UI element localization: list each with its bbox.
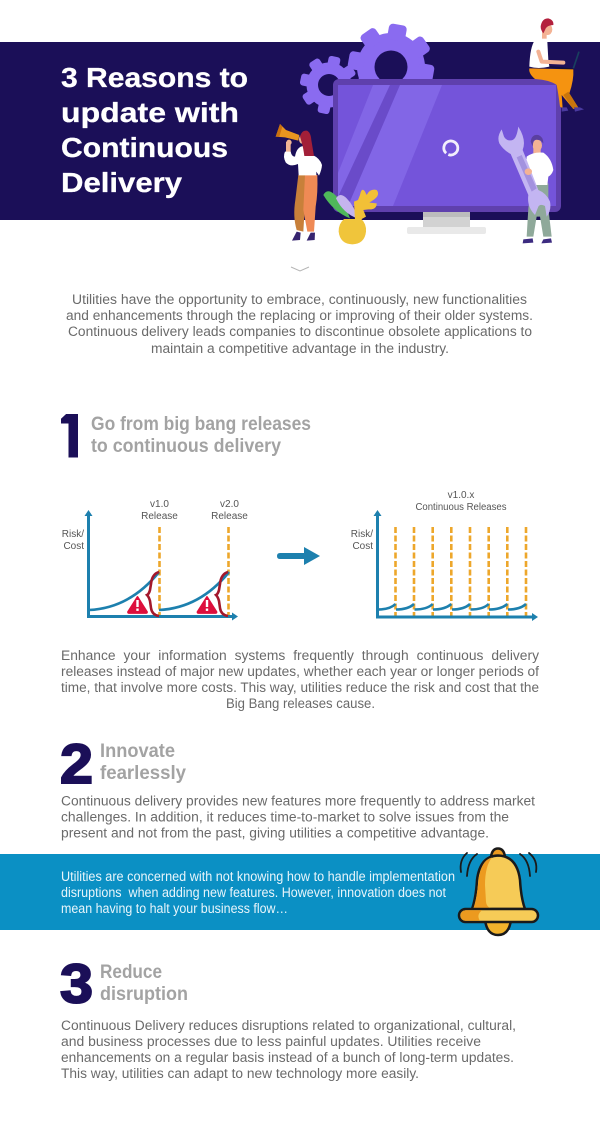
callout text: Utilities are concerned with not knowing how to handle implementation [61,869,455,884]
callout text: disruptions when adding new features. However, innovation does not [61,885,446,900]
labels: v2.0 [220,499,239,510]
section 2 paragraph [61,794,535,840]
icon: potted plant [323,190,378,244]
arrow [277,547,320,565]
labels: Cost [352,541,373,552]
section 3 paragraph [61,1018,516,1081]
intro text: and enhancements through the replacing or improving of their older systems. [66,308,533,323]
dashed release lines [160,527,228,617]
callout text [61,869,455,916]
section 3 paragraph: and business processes due to less painful updates. Utilities receive [61,1034,481,1049]
risk curve [378,604,526,610]
section 1 paragraph: Big Bang releases cause. [226,696,375,711]
callout band [0,854,600,930]
title: Continuous [61,132,228,163]
chart: continuous releases [351,490,538,621]
section 2 paragraph: Continuous delivery provides new features more frequently to address market [61,794,535,808]
labels: v1.0.x [448,490,474,501]
icon: small gear [295,51,363,119]
section 3 paragraph: This way, utilities can adapt to new technology more easily. [61,1066,419,1081]
monitor stand [407,212,486,234]
header band [0,42,600,220]
chart: big bang releases [62,499,248,620]
section 3 number: 3 [60,952,93,1014]
monitor [333,79,561,212]
intro text: Continuous delivery leads companies to discontinue obsolete applications to [68,324,532,339]
section 1 paragraph: Enhance your information systems frequently through continuous delivery [61,648,539,663]
labels: Continuous Releases [416,502,506,513]
icon: bell [459,848,538,935]
red braces [147,572,228,616]
section 1 heading [91,414,311,457]
intro text: maintain a competitive advantage in the industry. [151,341,449,356]
axes [84,510,238,620]
warning icons [128,597,216,613]
labels: Risk/ [351,529,373,540]
title [61,62,248,198]
section 3 heading: disruption [100,984,188,1005]
section 3 heading [100,962,188,1005]
section 1 heading: to continuous delivery [91,436,281,457]
figure: man with laptop [529,18,584,112]
title: Delivery [61,167,182,198]
intro text: Utilities have the opportunity to embrace, continuously, new functionalities [72,292,527,307]
labels: v1.0 [150,499,169,510]
risk curves [89,572,229,610]
section 1 paragraph: time, that involve more costs. This way, utilities reduce the risk and cost that the [61,680,539,695]
section 2 heading [100,741,186,784]
figure: man with wrench [498,127,553,243]
section 2 number: 2 [60,732,93,795]
labels: Cost [63,541,84,552]
section 2 paragraph: present and not from the past, giving utilities a competitive advantage. [61,826,489,840]
figure: woman with megaphone [276,124,322,241]
callout text: mean having to halt your business flow… [61,901,288,916]
icon: loading spinner [442,139,460,157]
section 2 heading: fearlessly [100,763,186,784]
section 3 paragraph: enhancements on a regular basis instead of a bunch of long-term updates. [61,1050,514,1065]
section 3 paragraph: Continuous Delivery reduces disruptions related to organizational, cultural, [61,1018,516,1033]
section 1 paragraph [61,648,539,711]
section 1 heading: Go from big bang releases [91,414,311,435]
section 1 paragraph: releases instead of major new updates, whether each year or longer periods of [61,664,539,679]
dashed release lines [396,527,526,617]
icon: large gear [341,17,441,117]
labels: Release [211,511,248,522]
section 3 heading: Reduce [100,962,162,983]
title: 3 Reasons to [61,62,248,93]
intro text [66,292,533,356]
title: update with [61,97,239,128]
section 1 number: 1 [60,399,86,477]
labels [351,490,506,552]
axes [374,510,538,621]
labels [62,499,248,552]
section 2 heading: Innovate [100,741,175,762]
sound waves [461,853,536,876]
labels: Risk/ [62,529,84,540]
labels: Release [141,511,178,522]
chevron [291,267,309,271]
section 2 paragraph: challenges. In addition, it reduces time-to-market to solve issues from the [61,810,509,824]
